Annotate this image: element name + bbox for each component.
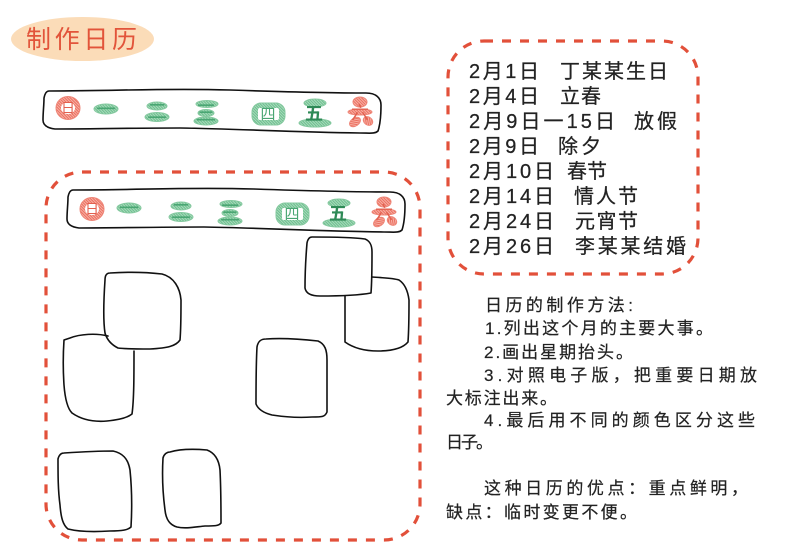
weekday: Monday: 一 [119, 198, 139, 220]
date box: center [256, 339, 327, 417]
weekday: Tuesday: 二 [147, 101, 167, 123]
weekday: Sunday: 日 [85, 201, 99, 217]
list: Feb 1 [469, 60, 668, 83]
title text: 制作日历 [26, 26, 137, 54]
title [11, 17, 154, 61]
list: Feb 9-15: 2月9日一15日 [469, 111, 615, 133]
weekday: Saturday: 六 [351, 103, 369, 123]
list: Feb 24: 元宵节 [575, 210, 638, 233]
weekday: Thursday: 四 [260, 106, 276, 123]
date box: bottom middle [163, 449, 221, 528]
weekday: Thursday [276, 203, 309, 225]
weekday: Wednesday: 三 [220, 202, 240, 225]
list: Feb 10: 春节 [567, 160, 607, 183]
weekday: Thursday [252, 103, 285, 125]
dashed border [448, 41, 698, 274]
text block: how to make the calendar: 3.对照电子版，把重要日期放 [484, 366, 757, 385]
weekday: Wednesday: 三 [196, 102, 216, 125]
weekday: Monday: 一 [96, 99, 116, 121]
list: Feb 4: 2月4日 [469, 86, 539, 108]
weekday: Sunday [56, 96, 80, 120]
text block: how to make the calendar: 日子。 [446, 433, 493, 452]
list: Feb 24 [469, 210, 638, 233]
list: Feb 10 [469, 160, 607, 183]
list: Feb 26 [469, 235, 686, 258]
text block: how to make the calendar: 日历的制作方法: [485, 296, 633, 315]
date box: upper left [104, 272, 181, 349]
text block: pros and cons: 缺点：临时变更不便。 [446, 503, 637, 522]
list: Feb 1: 丁某某生日 [560, 60, 668, 83]
date box: bottom left [58, 451, 132, 532]
list: Feb 10: 2月10日 [469, 161, 554, 183]
weekday: Saturday [372, 197, 398, 229]
list: Feb 4 [469, 85, 601, 108]
weekday header bar: top [43, 89, 381, 133]
list: Feb 1: 2月1日 [469, 61, 539, 83]
list: Feb 14: 情人节 [574, 185, 638, 208]
list: Feb 9: 2月9日 [469, 136, 539, 158]
text block: how to make the calendar: 2.画出星期抬头。 [484, 343, 633, 362]
weekday: Tuesday: 二 [171, 201, 191, 223]
weekday: Sunday [80, 198, 104, 220]
list: Feb 24: 2月24日 [469, 211, 554, 233]
weekday: Saturday: 六 [375, 203, 393, 223]
weekday: Friday [323, 199, 355, 227]
list: Feb 14 [469, 185, 638, 208]
weekday: Friday: 五 [305, 104, 323, 124]
weekday: Sunday: 日 [61, 100, 75, 116]
list: Feb 9: 除夕 [558, 135, 601, 158]
date box: lower left overlapped [63, 334, 134, 421]
list: Feb 26: 2月26日 [469, 236, 554, 258]
weekday: Friday [299, 99, 331, 127]
weekday: Friday: 五 [329, 204, 347, 224]
list: Feb 4: 立春 [560, 85, 601, 108]
list: Feb 14: 2月14日 [469, 186, 554, 208]
list: Feb 9 [469, 135, 601, 158]
text block: pros and cons: 这种日历的优点：重点鲜明， [484, 479, 748, 498]
date box: top right [305, 237, 372, 296]
weekday: Saturday [348, 97, 374, 129]
list: Feb 26: 李某某结婚 [575, 235, 686, 258]
text block: how to make the calendar: 1.列出这个月的主要大事。 [485, 319, 713, 338]
text block: how to make the calendar [446, 296, 757, 452]
list: Feb 9-15 [469, 110, 677, 133]
date box: behind top right [345, 277, 409, 351]
weekday: Thursday: 四 [284, 206, 300, 223]
panel: key dates list [448, 41, 698, 274]
list: Feb 9-15: 放假 [634, 110, 677, 133]
panel: calendar mock-up [46, 172, 420, 540]
text block: pros and cons [446, 479, 748, 522]
title background ellipse [11, 17, 154, 61]
text block: how to make the calendar: 4.最后用不同的颜色区分这些 [484, 411, 755, 430]
text block: how to make the calendar: 大标注出来。 [446, 389, 557, 408]
weekday header bar: in calendar [67, 188, 405, 232]
